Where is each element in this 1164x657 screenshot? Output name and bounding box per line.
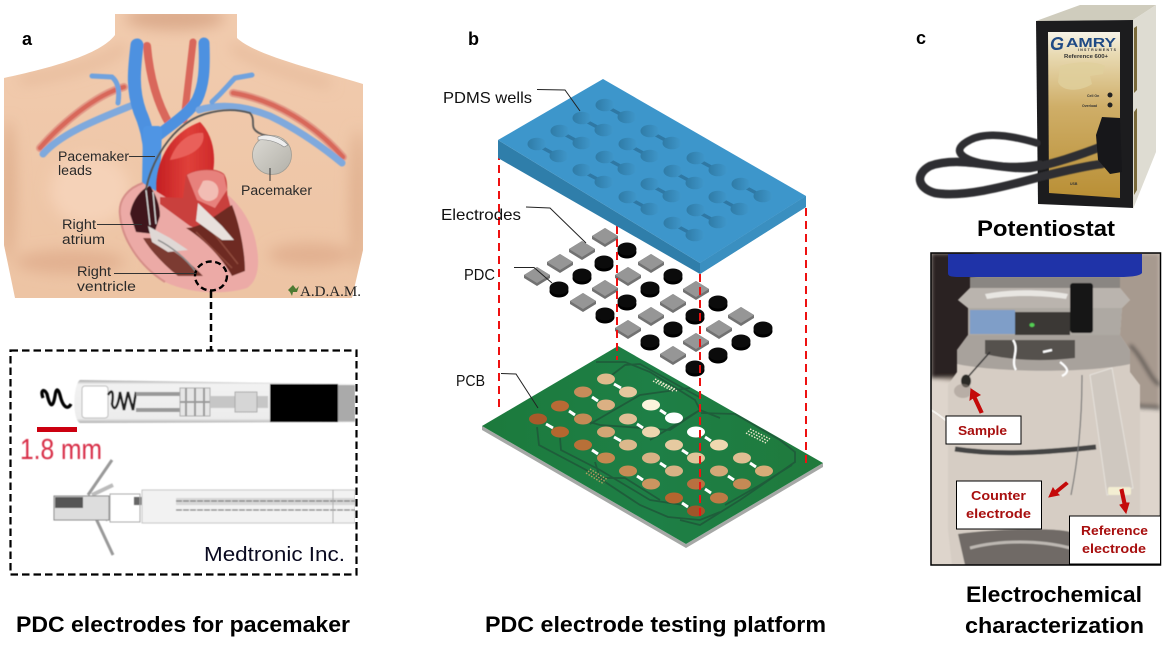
label: right ventricle: Right (77, 264, 111, 279)
callout: Reference electrode: electrode (1082, 541, 1146, 556)
image: tined lead (54, 460, 355, 555)
label: PDC (464, 267, 552, 284)
label: right atrium: atrium (62, 232, 105, 247)
label: right atrium: Right (62, 217, 96, 232)
PCB contact dots (586, 379, 770, 484)
arrow: to sample (970, 389, 983, 413)
right ventricle cavity (143, 238, 203, 276)
sample (967, 352, 990, 378)
callout: Counter electrode: Counter (971, 488, 1026, 503)
counter electrode wire (1071, 375, 1082, 495)
label: pacemaker leads (58, 149, 155, 178)
valves (196, 203, 234, 240)
logo: A.D.A.M.: A.D.A.M. (300, 284, 361, 300)
label: right ventricle (77, 264, 196, 294)
brand text: Gamry (1050, 34, 1117, 60)
photo: electrochemical cell (931, 253, 1160, 565)
heading: PDC electrodes for pacemaker: PDC electrodes for pacemaker (16, 612, 350, 637)
brand text: Gamry: G (1050, 34, 1064, 54)
red dashed alignment lines (499, 152, 806, 520)
scale bar: 1.8 mm: 1.8 mm (20, 434, 102, 466)
reference tube (1090, 368, 1133, 495)
label: PCB (456, 373, 538, 408)
label: pacemaker leads: Pacemaker (58, 149, 130, 164)
heading: Potentiostat: Potentiostat (977, 216, 1116, 241)
blood vessels (40, 42, 343, 188)
label: pacemaker (241, 168, 313, 198)
cap (948, 254, 1142, 277)
front panel labels: Overload (1082, 104, 1097, 108)
label: Electrodes (441, 207, 586, 243)
label: right ventricle: ventricle (77, 279, 136, 294)
callout: Reference electrode: Reference (1081, 523, 1148, 538)
jar neck and lip (970, 277, 1120, 288)
right atrium (130, 186, 160, 234)
left ventricle muscle (186, 205, 245, 276)
image: screw-in lead (42, 380, 355, 423)
brand text: Gamry: INSTRUMENTS (1078, 48, 1117, 52)
pacemaker lead wire (146, 110, 275, 190)
image: potentiostat instrument (920, 5, 1156, 209)
label: c: c (916, 28, 926, 48)
label: right atrium (62, 217, 142, 247)
label: Medtronic Inc.: Medtronic Inc. (204, 544, 345, 566)
dashed circle highlight on ventricle (195, 262, 227, 290)
panel c: electrochemical setup (916, 5, 1160, 638)
arrow: to counter electrode (1049, 482, 1068, 497)
PCB electrode pads (529, 374, 773, 516)
label: Electrodes: Electrodes (441, 207, 521, 224)
front panel labels (1070, 92, 1112, 186)
front panel labels: USB (1070, 182, 1078, 186)
brand text: Gamry: AMRY (1066, 35, 1116, 50)
label: b: b (468, 29, 479, 49)
electrode and PDC layer (524, 228, 772, 376)
label: PDC: PDC (464, 267, 495, 284)
icon: pacemaker device (252, 135, 292, 174)
arrow: to reference electrode (1120, 489, 1129, 513)
panel: electrode leads photo box (10, 350, 356, 574)
connector (1096, 117, 1122, 174)
label: a: a (22, 29, 33, 49)
panel a: pacemaker anatomy (0, 6, 366, 637)
front panel labels: Cell On (1087, 94, 1099, 98)
jar shoulder (957, 335, 1130, 371)
bottom of jar (958, 529, 1070, 565)
callout: Counter electrode: electrode (966, 506, 1031, 521)
label: pacemaker: Pacemaker (241, 183, 313, 198)
label: pacemaker leads: leads (58, 163, 92, 178)
label: PDMS wells (443, 90, 580, 111)
wells (528, 99, 772, 241)
callout: Sample: Sample (958, 423, 1007, 438)
panel b: electrode testing platform (441, 29, 826, 637)
black band behind jar (955, 447, 1096, 453)
callout: Sample (946, 416, 1021, 444)
label: PDMS wells: PDMS wells (443, 90, 532, 107)
jar glass (948, 277, 1140, 565)
brand text: Gamry: Reference 600+ (1064, 54, 1108, 60)
heading: Electrochemical characterization: Electrochemical (966, 582, 1142, 607)
callout: Counter electrode (956, 481, 1042, 529)
heart (120, 122, 258, 292)
label: PCB: PCB (456, 373, 485, 390)
PDMS wells block (498, 79, 806, 274)
dashed connector (210, 291, 212, 350)
left atrium and aortic root (160, 169, 232, 232)
cables (920, 135, 1103, 194)
PCB traces (537, 362, 795, 525)
heading: Electrochemical characterization (965, 582, 1144, 638)
scale bar: 1.8 mm (21, 427, 102, 460)
heading: PDC electrode testing platform: PDC electrode testing platform (485, 612, 826, 637)
anatomical illustration: chest and heart (0, 6, 366, 298)
PCB board (482, 346, 823, 548)
callout: Reference electrode (1070, 516, 1160, 564)
heading: Electrochemical characterization: characterization (965, 613, 1144, 638)
